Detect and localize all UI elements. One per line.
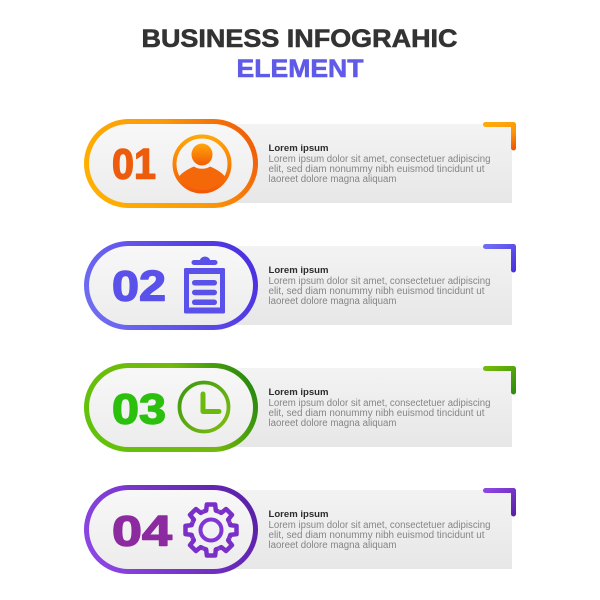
text panel background 03	[228, 368, 512, 447]
text block 02: elit, sed diam nonummy nibh euismod tincidunt ut	[268, 286, 485, 297]
text block 04: laoreet dolore magna aliquam	[268, 540, 396, 551]
number 02: 02	[112, 262, 166, 310]
pill 03	[86, 366, 256, 450]
number 04: 04	[112, 508, 172, 556]
pill 04	[86, 488, 256, 572]
title: ELEMENT	[236, 55, 364, 83]
icon: clipboard	[184, 257, 225, 314]
icon: clock	[180, 382, 228, 432]
title: BUSINESS INFOGRAHIC	[142, 25, 458, 53]
text block 03: laoreet dolore magna aliquam	[268, 418, 396, 429]
icon: person	[174, 136, 230, 196]
text block 02: Lorem ipsum dolor sit amet, consectetuer adipiscing	[268, 276, 490, 287]
text block 02: Lorem ipsum	[268, 265, 328, 276]
text block 02: laoreet dolore magna aliquam	[268, 296, 396, 307]
text block 03: elit, sed diam nonummy nibh euismod tincidunt ut	[268, 408, 485, 419]
corner bracket 03	[486, 368, 514, 392]
text block 04: elit, sed diam nonummy nibh euismod tincidunt ut	[268, 530, 485, 541]
text block 04: Lorem ipsum dolor sit amet, consectetuer adipiscing	[268, 520, 490, 531]
text block 01: elit, sed diam nonummy nibh euismod tincidunt ut	[268, 164, 485, 175]
text block 03: Lorem ipsum	[268, 387, 328, 398]
text block 01: Lorem ipsum	[268, 143, 328, 154]
text block 01: laoreet dolore magna aliquam	[268, 174, 396, 185]
text panel background 04	[228, 490, 512, 569]
panel: step 04	[86, 488, 514, 572]
number 03: 03	[112, 386, 166, 434]
text block 02	[268, 265, 490, 307]
pill 01	[86, 122, 256, 206]
panel: step 01	[86, 122, 514, 206]
corner bracket 02	[486, 246, 514, 270]
number 01: 01	[112, 140, 156, 188]
text panel background 02	[228, 246, 512, 325]
title	[142, 25, 458, 83]
corner bracket 04	[486, 490, 514, 514]
text block 03	[268, 387, 490, 429]
text block 01: Lorem ipsum dolor sit amet, consectetuer adipiscing	[268, 154, 490, 165]
text block 03: Lorem ipsum dolor sit amet, consectetuer adipiscing	[268, 398, 490, 409]
icon: gear	[186, 504, 236, 556]
text panel background 01	[228, 124, 512, 203]
panel: step 02	[86, 244, 514, 328]
panel: step 03	[86, 366, 514, 450]
pill 02	[86, 244, 256, 328]
text block 04: Lorem ipsum	[268, 509, 328, 520]
text block 04	[268, 509, 490, 551]
text block 01	[268, 143, 490, 185]
corner bracket 01	[486, 124, 514, 148]
